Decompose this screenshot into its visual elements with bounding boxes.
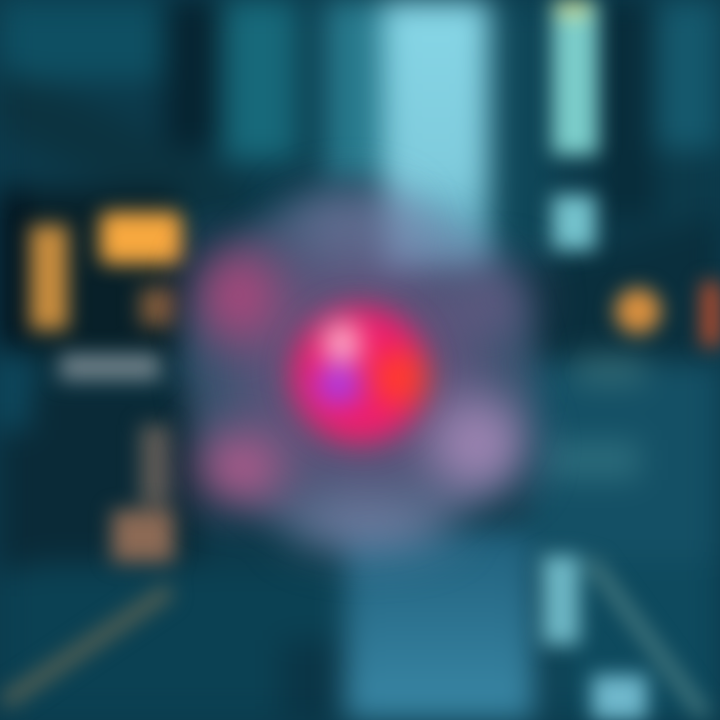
orb halo	[165, 173, 555, 563]
right buildings	[490, 0, 720, 720]
sky gap and street	[345, 0, 535, 720]
orb core	[292, 307, 428, 443]
glowing orb	[165, 173, 555, 563]
left buildings	[0, 0, 385, 720]
